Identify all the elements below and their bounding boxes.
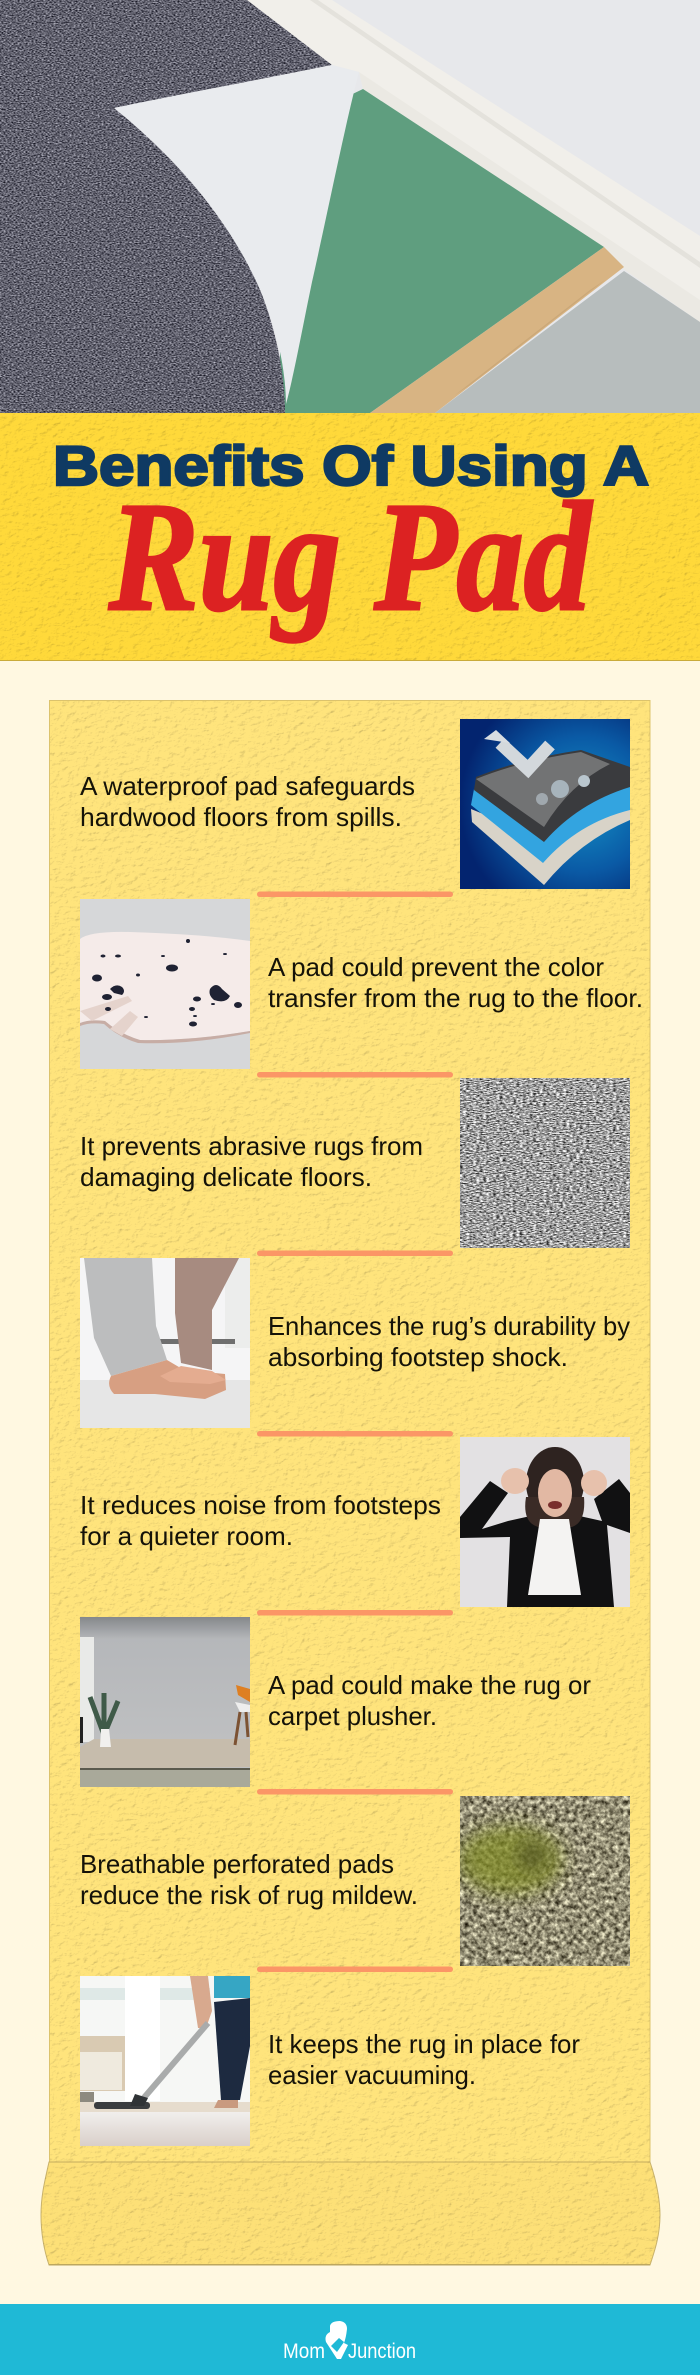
benefit 8: vacuuming xyxy=(80,1976,580,2146)
footer bar xyxy=(0,2304,700,2375)
benefit 1: waterproof xyxy=(80,719,630,889)
benefit 4: absorbs shock xyxy=(80,1258,630,1428)
benefit 3: abrasive rugs xyxy=(80,1078,630,1248)
divider xyxy=(257,1431,453,1436)
text: Enhances the rug’s durability by xyxy=(268,1311,630,1341)
text: It prevents abrasive rugs from xyxy=(80,1131,423,1161)
folded white underside xyxy=(114,65,359,404)
divider xyxy=(257,1250,453,1256)
benefit 7: mildew xyxy=(80,1796,630,1966)
image: woman covering ears xyxy=(460,1437,630,1607)
text: It reduces noise from footsteps xyxy=(80,1490,441,1520)
logo icon xyxy=(326,2321,348,2359)
text: A pad could make the rug or xyxy=(268,1670,591,1700)
hero photo: rug peeled back over green pad xyxy=(0,0,700,413)
concrete floor xyxy=(435,271,700,413)
divider xyxy=(257,1072,453,1078)
text: transfer from the rug to the floor. xyxy=(268,983,643,1013)
title banner xyxy=(0,413,700,661)
baseboard xyxy=(247,0,700,322)
divider xyxy=(257,892,453,897)
benefit 2: colour transfer xyxy=(80,899,643,1069)
title line 2: Rug Pad xyxy=(108,470,593,643)
title line 1: Benefits Of Using A xyxy=(53,434,649,497)
image: room with carpet xyxy=(80,1617,250,1787)
text: absorbing footstep shock. xyxy=(268,1342,568,1372)
divider xyxy=(257,1610,453,1616)
benefit 6: plusher rug xyxy=(80,1617,591,1787)
image: person vacuuming xyxy=(80,1976,250,2146)
benefit 5: reduces noise xyxy=(80,1437,630,1607)
green pad xyxy=(280,89,604,413)
wall xyxy=(0,0,700,413)
text: Breathable perforated pads xyxy=(80,1849,394,1879)
image: bare feet on carpet xyxy=(80,1258,250,1428)
text: for a quieter room. xyxy=(80,1521,293,1551)
text: carpet plusher. xyxy=(268,1701,437,1731)
text: A pad could prevent the color xyxy=(268,952,604,982)
rug surface xyxy=(0,0,340,413)
yellow rug panel xyxy=(50,700,650,2162)
image: mildew on concrete xyxy=(460,1796,630,1966)
rolled rug end xyxy=(40,2162,662,2266)
divider xyxy=(257,1789,453,1794)
text: A waterproof pad safeguards xyxy=(80,771,415,801)
divider xyxy=(257,1966,453,1972)
image: stained pad xyxy=(80,899,250,1069)
chipboard edge xyxy=(370,247,624,413)
image: waterproof layers xyxy=(460,719,630,889)
text: It keeps the rug in place for xyxy=(268,2029,580,2059)
text: reduce the risk of rug mildew. xyxy=(80,1880,418,1910)
text: easier vacuuming. xyxy=(268,2060,476,2090)
logo wordmark: Mom xyxy=(283,2340,325,2363)
text: damaging delicate floors. xyxy=(80,1162,372,1192)
text: hardwood floors from spills. xyxy=(80,802,402,832)
logo: MomJunction xyxy=(283,2321,416,2363)
image: abrasive rug texture xyxy=(460,1078,630,1248)
banner background xyxy=(0,413,700,661)
logo wordmark: Junction xyxy=(348,2340,416,2363)
